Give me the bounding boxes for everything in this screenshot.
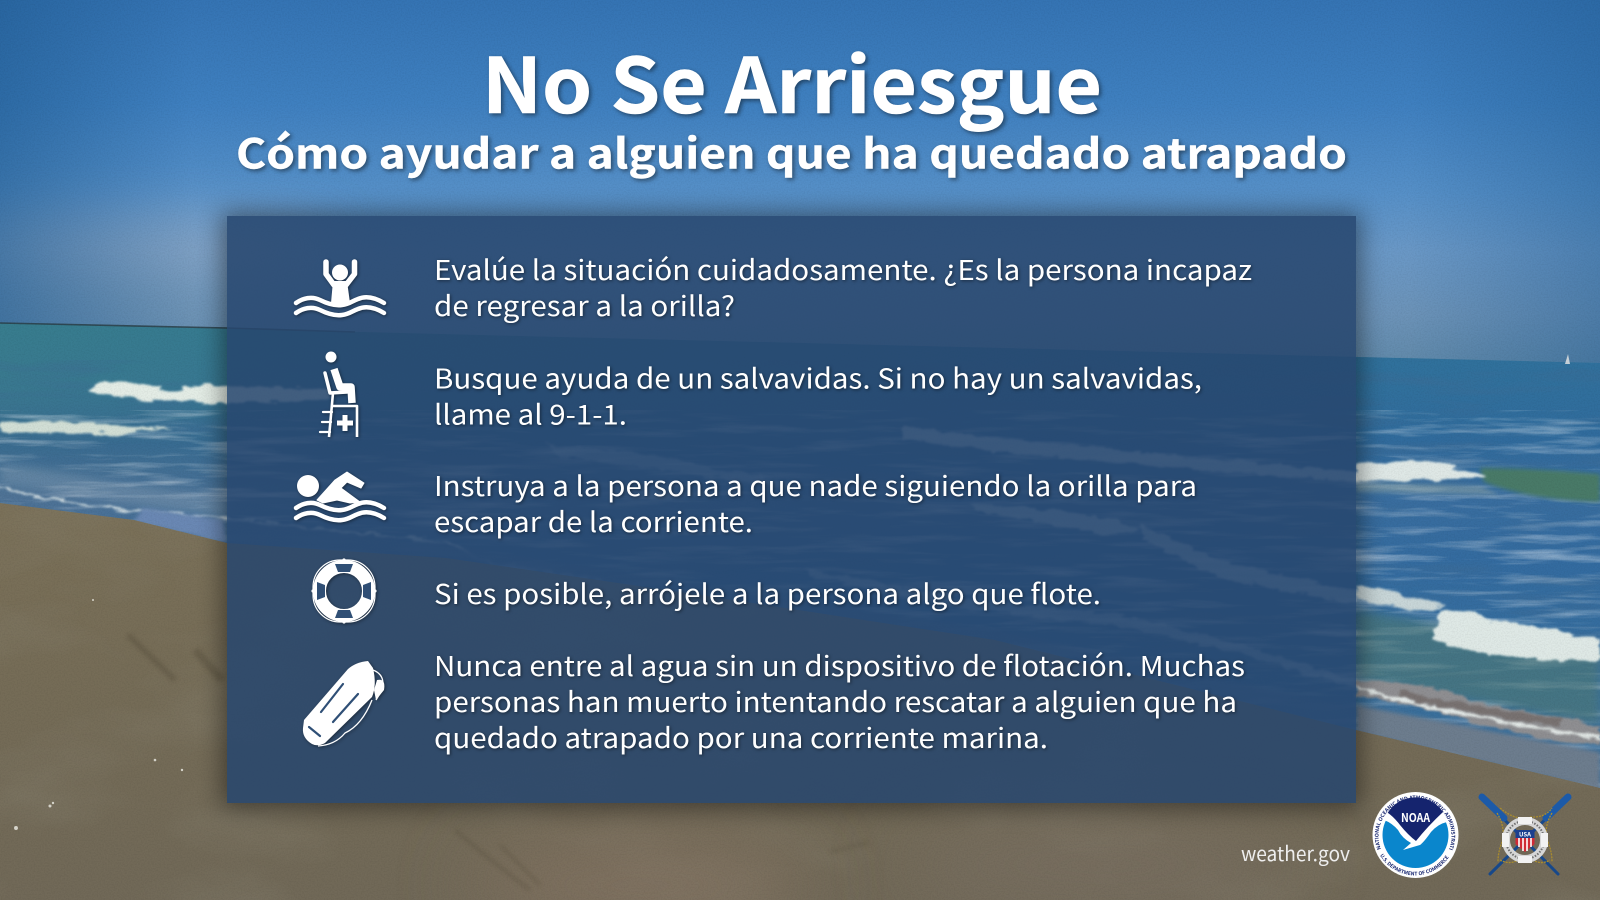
title block [236,25,1347,180]
sand [0,503,1600,900]
ocean [0,323,1600,800]
step 1: de regresar a la orilla? [434,284,735,324]
icon: lifeguard chair [320,352,357,437]
clouds [0,219,340,316]
logo: USLA lifesaving: USA [1519,830,1531,838]
subtitle: Cómo ayudar a alguien que ha quedado atrapado [236,120,1347,180]
logo: NOAA: NATIONAL OCEANIC AND ATMOSPHERIC ADMINISTRATION [1374,796,1456,850]
panel: steps [227,216,1356,803]
icon: rescue tube [303,661,384,746]
sand texture [14,599,1132,900]
step 2: Busque ayuda de un salvavidas. Si no hay un salvavidas, [434,356,1202,396]
sailboat [1565,354,1570,364]
horizon breakwater [0,323,355,332]
center waves under panel [545,426,1360,688]
step 5: quedado atrapado por una corriente marina. [434,716,1048,756]
logo: NOAA: NOAA [1401,809,1430,826]
left breaking waves [0,380,603,580]
step text [434,248,1252,756]
panel shadow [222,212,1361,809]
water texture [0,410,1600,788]
step 2: llame al 9-1-1. [434,392,627,432]
step 5: personas han muerto intentando rescatar a alguien que ha [434,680,1237,720]
sky [0,0,1600,370]
logo: NOAA: U.S. DEPARTMENT OF COMMERCE [1380,854,1449,876]
step 5: Nunca entre al agua sin un dispositivo de flotación. Muchas [434,644,1245,684]
step 1: Evalúe la situación cuidadosamente. ¿Es la persona incapaz [434,248,1252,288]
icon: person signalling in water [296,262,384,315]
step 3: escapar de la corriente. [434,500,753,540]
title: No Se Arriesgue [482,25,1102,135]
icons column [296,262,384,746]
right crest and green wave [1356,461,1600,502]
logo: USLA lifesaving [1482,797,1568,874]
wet sand [134,508,1600,790]
website label: weather.gov [1241,838,1351,867]
icon: swimmer [296,472,384,520]
icon: life ring [311,558,377,624]
sky vignette [0,0,1600,370]
step 4: Si es posible, arrójele a la persona algo que flote. [434,572,1101,612]
right foam [1356,585,1600,745]
step 3: Instruya a la persona a que nade siguiendo la orilla para [434,464,1197,504]
